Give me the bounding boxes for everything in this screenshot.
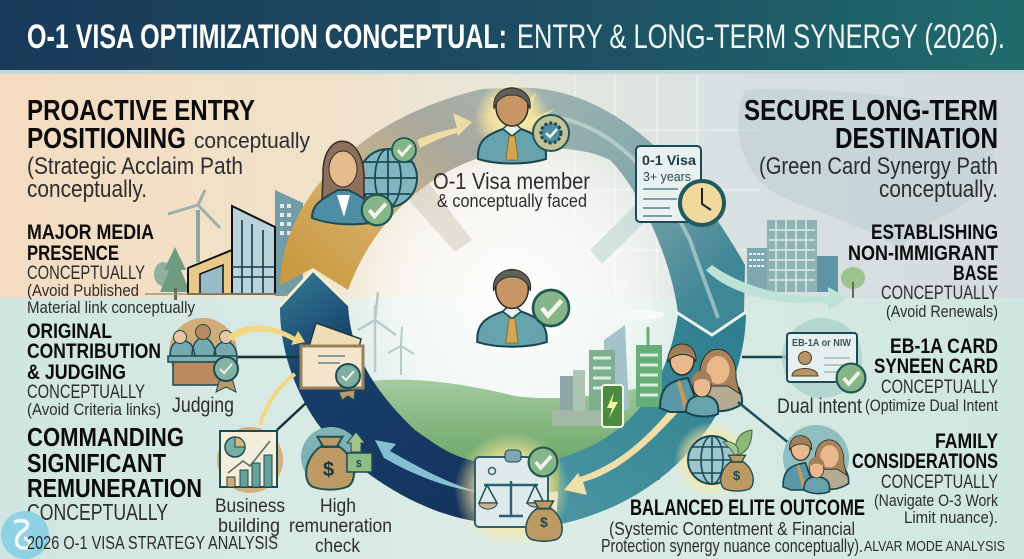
arrow: pale blue return xyxy=(375,440,478,492)
connector: judging xyxy=(238,356,300,358)
header banner xyxy=(0,0,1024,74)
arrow: business to certificate xyxy=(260,374,295,425)
icon: money bag: $ xyxy=(323,459,334,481)
panel: entry heading: (Strategic Acclaim Path xyxy=(27,153,243,180)
icon: balance clipboard: $ xyxy=(540,514,548,530)
label: Judging: Judging xyxy=(172,394,234,417)
text: establishing base: ESTABLISHING xyxy=(871,221,998,244)
icon: visa document with clock xyxy=(636,146,724,225)
label: High remuneration check: High xyxy=(320,496,356,517)
text: EB-1A card: (Optimize Dual Intent xyxy=(865,396,998,415)
text: original contribution and judging: ORIGINAL xyxy=(27,320,112,343)
text: major media presence: MAJOR MEDIA xyxy=(27,221,154,244)
text: balanced elite outcome: BALANCED ELITE OUTCOME xyxy=(630,495,865,520)
icon: EB-1A card: EB-1A or NIW xyxy=(792,338,852,349)
skyline left xyxy=(145,190,303,300)
text: establishing base: (Avoid Renewals) xyxy=(886,302,998,321)
text: major media presence: CONCEPTUALLY xyxy=(27,263,145,284)
center hill and turbines xyxy=(350,292,680,500)
panel: entry heading: conceptually. xyxy=(27,176,147,203)
panel: entry heading: conceptually xyxy=(194,128,310,153)
label: O-1 Visa member: & conceptually faced xyxy=(437,191,587,211)
text: EB-1A card: EB-1A CARD xyxy=(890,335,998,358)
text: family considerations: FAMILY xyxy=(935,430,998,453)
label: Business building xyxy=(215,496,285,537)
text: major media presence: (Avoid Published xyxy=(27,281,139,300)
arrow: gold return lower right xyxy=(564,405,680,495)
text: major media presence: Material link conceptually xyxy=(27,298,195,317)
icon: money bag: $ xyxy=(356,459,362,470)
panel: entry heading: POSITIONING xyxy=(27,123,186,155)
icon: woman with globe xyxy=(312,138,417,225)
ring arc: teal lower right xyxy=(556,312,746,525)
icon: money bag xyxy=(301,427,372,490)
text: EB-1A card xyxy=(865,335,998,415)
text: family considerations xyxy=(852,430,998,527)
text: commanding significant remuneration: SIGNIFICANT xyxy=(27,448,166,478)
text: EB-1A card: SYNEEN CARD xyxy=(874,355,998,378)
icon: judges panel xyxy=(168,318,238,392)
label: Business building: building xyxy=(218,516,280,537)
label: High remuneration check: remuneration xyxy=(289,516,392,537)
text: family considerations: (Navigate O-3 Work xyxy=(874,491,998,510)
text: major media presence: PRESENCE xyxy=(27,242,119,265)
connector: family to card xyxy=(742,356,788,358)
icon: family on ring xyxy=(660,344,742,416)
center city xyxy=(552,310,664,427)
panel: long-term heading xyxy=(744,95,998,203)
text: commanding significant remuneration xyxy=(27,422,202,525)
city right xyxy=(747,220,865,298)
panel: long-term heading: DESTINATION xyxy=(835,123,998,155)
panel: long-term heading: conceptually. xyxy=(879,176,998,203)
title: O-1 VISA OPTIMIZATION CONCEPTUAL: xyxy=(27,18,507,56)
icon: visa document with clock: 3+ years xyxy=(643,169,691,184)
navy arrowhead outline xyxy=(280,270,349,306)
icon: logo badge xyxy=(1,511,49,559)
ring arc: gray long-term xyxy=(510,88,745,334)
panel: entry heading xyxy=(27,95,310,203)
ring arc: gold entry xyxy=(280,88,512,290)
text: original contribution and judging: & JUDGING xyxy=(27,361,126,384)
text: balanced elite outcome: (Systemic Contentment & Financial xyxy=(609,519,855,539)
icon: EB-1A card xyxy=(782,318,865,398)
icon: central member xyxy=(477,270,569,347)
label: Dual intent: Dual intent xyxy=(777,395,862,418)
arrow: entry gold glint xyxy=(417,113,472,148)
text: commanding significant remuneration: CONCEPTUALLY xyxy=(27,499,168,525)
arrow: teal long-term xyxy=(706,265,848,310)
connector: family to considerations xyxy=(738,402,790,444)
label: O-1 Visa member: O-1 Visa member xyxy=(433,168,590,194)
label: Business building: Business xyxy=(215,496,285,517)
icon: O-1 visa member xyxy=(468,80,569,164)
icon: family considerations xyxy=(783,425,849,494)
text: original contribution and judging: (Avoid Criteria links) xyxy=(27,400,161,419)
text: balanced elite outcome: Protection synergy nuance conceptually). xyxy=(601,536,863,556)
arrow: judging to certificate xyxy=(228,326,305,345)
footer: strategy analysis: 2026 O-1 VISA STRATEGY ANALYSIS xyxy=(27,533,278,553)
label: High remuneration check xyxy=(289,496,392,557)
label: High remuneration check: check xyxy=(315,536,360,557)
text: original contribution and judging xyxy=(27,320,161,419)
icon: business chart xyxy=(217,427,283,493)
text: commanding significant remuneration: COMMANDING xyxy=(27,422,184,452)
V notch outline xyxy=(676,312,746,335)
text: commanding significant remuneration: REMUNERATION xyxy=(27,473,202,503)
text: establishing base xyxy=(848,221,998,321)
panel: entry heading: PROACTIVE ENTRY xyxy=(27,95,255,127)
icon: balance clipboard xyxy=(454,432,570,548)
connector: business xyxy=(277,403,306,430)
text: family considerations: Limit nuance). xyxy=(904,508,998,527)
text: establishing base: NON-IMMIGRANT xyxy=(848,242,998,265)
icon: globe with money xyxy=(674,422,753,498)
text: original contribution and judging: CONCEPTUALLY xyxy=(27,382,145,403)
text: major media presence xyxy=(27,221,195,317)
ring arc: navy lower left xyxy=(280,272,482,522)
icon: certificates xyxy=(301,323,363,400)
text: original contribution and judging: CONTRIBUTION xyxy=(27,340,161,363)
icon: visa document with clock: 0-1 Visa xyxy=(642,152,696,168)
text: balanced elite outcome xyxy=(601,495,865,556)
band highlight streak xyxy=(560,118,718,318)
label: O-1 Visa member xyxy=(433,168,590,211)
icon: globe with money: $ xyxy=(733,468,741,483)
text: establishing base: BASE xyxy=(953,262,998,285)
